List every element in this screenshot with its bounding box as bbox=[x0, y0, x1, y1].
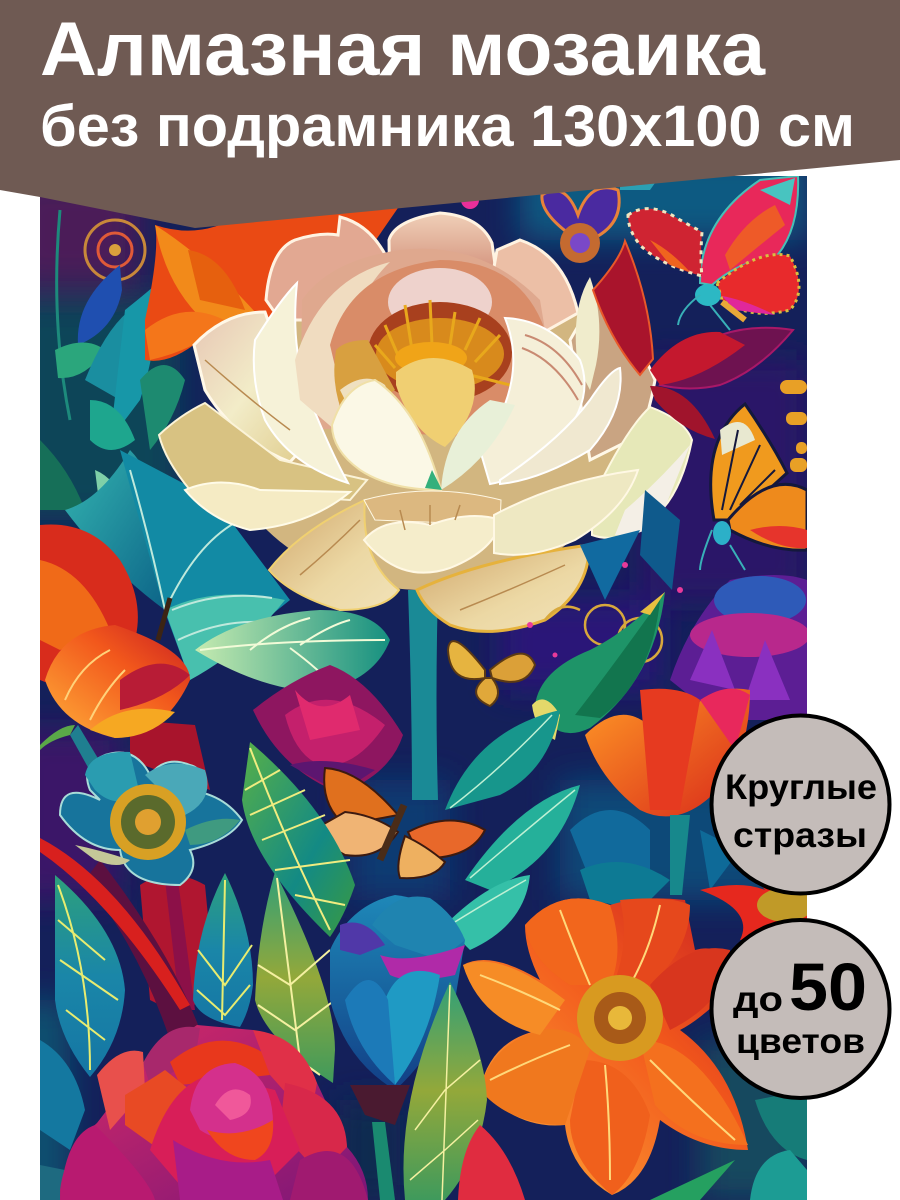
right orange tulip bbox=[585, 689, 750, 895]
bottom petals bbox=[269, 500, 399, 610]
badge: round rhinestones bbox=[712, 716, 890, 894]
right inner petals bbox=[480, 318, 584, 484]
blue flower, centre bottom bbox=[330, 895, 465, 1200]
maroon flower bbox=[253, 665, 403, 793]
green flower bud bbox=[532, 592, 665, 740]
badge: up to 50 colours: 50 bbox=[789, 950, 867, 1025]
striped leaf, centre left bbox=[242, 742, 355, 937]
subtitle: без подрамника 130х100 см bbox=[40, 94, 855, 159]
top-left decorative swirl bbox=[57, 210, 145, 420]
big orange flower bbox=[463, 898, 748, 1195]
far right petal bbox=[592, 407, 692, 538]
header banner bbox=[0, 0, 900, 228]
badge: round rhinestones: Круглые bbox=[725, 768, 877, 807]
purple flower, right bbox=[527, 562, 810, 720]
top-left blue-teal foliage bbox=[40, 265, 185, 520]
rose bbox=[60, 1025, 368, 1200]
butterfly: red and pink, top right bbox=[628, 176, 799, 330]
teal leaves, centre bbox=[445, 710, 740, 950]
painting: floral diamond mosaic bbox=[10, 150, 813, 1200]
badge: up to 50 colours: до bbox=[733, 980, 783, 1019]
orange flower behind peony bbox=[145, 205, 400, 361]
small golden butterfly bbox=[448, 641, 535, 706]
badge: up to 50 colours bbox=[712, 920, 890, 1098]
lower leaves bbox=[40, 872, 335, 1200]
inner rear pink bbox=[330, 260, 545, 440]
small purple flower, top bbox=[461, 184, 654, 263]
peony flower bbox=[159, 213, 692, 631]
left orange tulip bbox=[40, 524, 190, 750]
painting background bbox=[10, 150, 807, 1200]
orange bars, right edge bbox=[780, 380, 807, 472]
orange butterfly, centre bbox=[322, 768, 485, 878]
butterfly: orange, right bbox=[700, 404, 807, 570]
title: Алмазная мозаика bbox=[40, 7, 766, 92]
teal butterfly-shaped leaf bbox=[65, 450, 290, 680]
bottom tulip bbox=[458, 1125, 525, 1200]
badge: up to 50 colours: цветов bbox=[736, 1022, 865, 1061]
stamens bbox=[368, 302, 512, 402]
peony base bbox=[266, 315, 618, 590]
bottom centre leaf bbox=[403, 982, 487, 1200]
right outer petals bbox=[570, 290, 655, 460]
peony stem bbox=[408, 590, 438, 800]
bottom right teal leaves bbox=[650, 1090, 807, 1200]
back petals bbox=[388, 212, 495, 266]
blue flower, left bbox=[60, 752, 242, 885]
dark red leaves, upper right bbox=[580, 241, 793, 600]
inner left petal bbox=[295, 262, 390, 430]
badge: round rhinestones: стразы bbox=[733, 816, 867, 855]
decorative swirl bbox=[545, 605, 662, 662]
small orange flower, right edge bbox=[700, 855, 813, 940]
centre petals bbox=[332, 380, 441, 490]
green leaf under peony bbox=[195, 610, 390, 692]
left petals bbox=[194, 312, 310, 462]
